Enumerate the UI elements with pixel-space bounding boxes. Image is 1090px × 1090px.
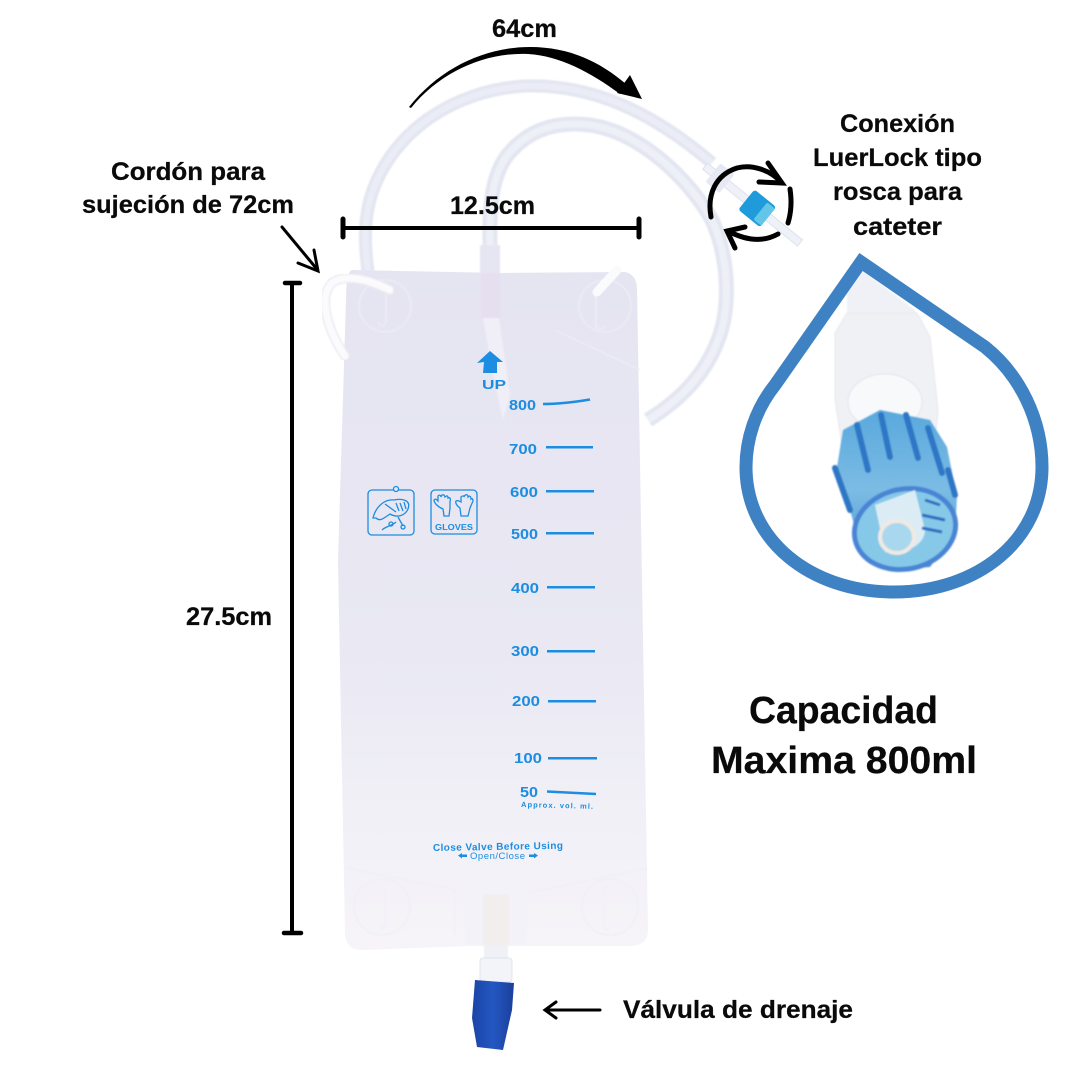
label: luer connection: LuerLock tipo [813,144,982,172]
label: drain valve: Válvula de drenaje [623,996,853,1024]
icon: gloves [431,490,477,534]
label: luer connection [813,110,982,241]
icon: gloves: GLOVES [435,522,473,532]
volume scale: 100 [514,750,542,767]
left cord loop [325,278,390,356]
volume scale: 300 [511,643,539,660]
arrow: cord [282,227,318,271]
small luer connector [697,156,808,253]
up arrow [477,351,506,392]
twist arrows [710,163,791,248]
label: luer connection: rosca para [833,178,963,206]
arrow: tube length label: 64cm [492,15,557,43]
bag body [338,270,648,950]
drain valve [472,958,514,1050]
volume scale: 500 [511,526,538,543]
arrow: drain valve [545,1002,600,1018]
volume scale: 200 [512,693,540,710]
drop outline [746,262,1042,592]
volume scale: 800 [509,397,536,414]
volume scale: 50 [520,784,538,801]
volume scale: 400 [511,580,539,597]
top inlet [480,245,510,420]
label: luer connection: Conexión [840,110,955,138]
dimension: width [343,219,639,237]
detail drop callout [746,262,1042,592]
label: height: 27.5cm [186,603,272,631]
label: width: 12.5cm [450,192,535,220]
label: cord: Cordón para [111,158,266,186]
right cord stub [597,270,617,292]
capacity heading: Maxima 800ml [711,740,977,782]
icon: hand washing [368,486,414,535]
volume scale: Approx. vol. ml. [521,800,593,811]
dimension: height [284,283,301,933]
valve instructions: Open/Close [470,851,525,862]
volume scale: 600 [510,484,538,501]
label: cord [82,158,294,219]
long patient tube [365,86,712,272]
clear luer body [835,272,938,445]
blue luer cap [835,410,963,579]
volume scale: 700 [509,441,537,458]
up arrow: UP [482,377,506,392]
volume scale [509,397,597,811]
valve instructions [433,841,563,862]
label: cord: sujeción de 72cm [82,191,294,219]
seal details [347,280,647,935]
outlet tube [465,865,530,963]
valve instructions: Close Valve Before Using [433,841,563,854]
capacity heading [711,690,977,782]
label: luer connection: cateter [853,213,942,241]
inner tube loop [490,124,726,420]
drainage bag [325,245,648,963]
arrow: tube length [409,47,642,108]
capacity heading: Capacidad [749,690,938,732]
